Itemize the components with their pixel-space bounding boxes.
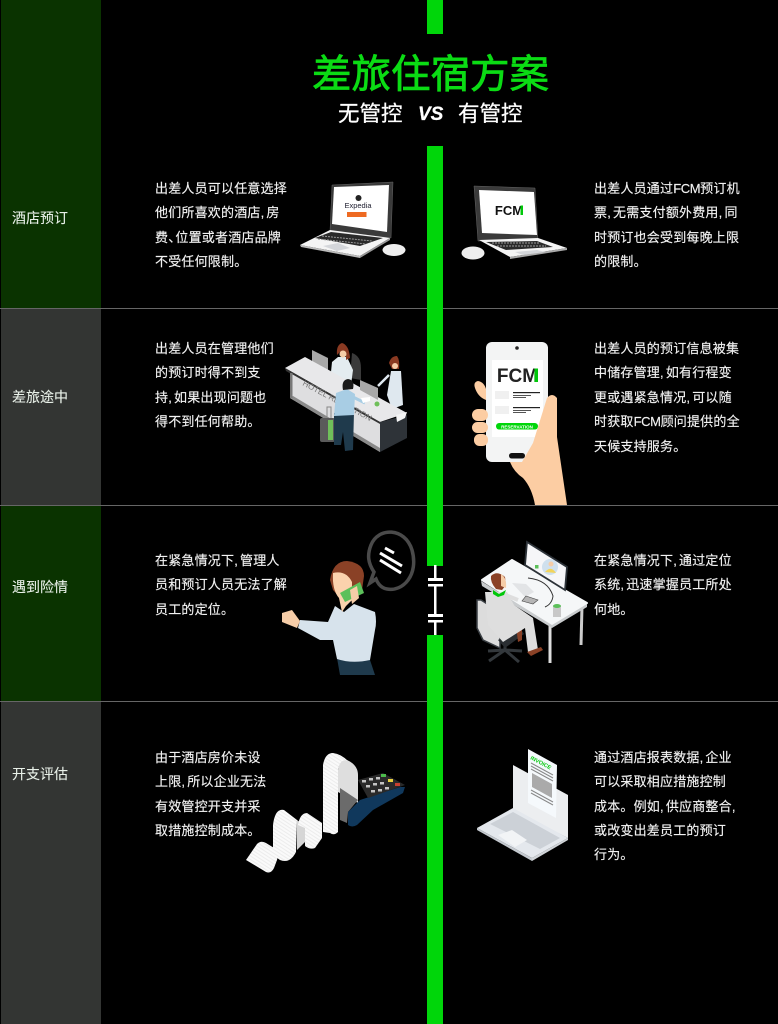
icon: laptop with FCM: FCM: [495, 203, 523, 218]
text: emergencies with control: 系统,迅速掌握员工所处: [594, 577, 732, 592]
text: emergencies without control: 员工的定位。: [155, 602, 234, 617]
row label: during trip: 差旅途中: [12, 389, 68, 405]
text: emergencies without control: [155, 553, 287, 617]
icon: laptop with invoice: INVOICE: [529, 755, 552, 772]
text: during trip without control: 的预订时得不到支: [155, 365, 261, 380]
subtitle: no control vs control: VS: [418, 104, 444, 125]
text: emergencies with control: 何地。: [594, 602, 634, 617]
text: during trip with FCM: 更或遇紧急情况,可以随: [594, 390, 732, 405]
icon: payment terminal with receipt: [246, 753, 405, 872]
text: hotel booking with FCM: [594, 181, 740, 269]
icon: hand holding phone: RESERVATION: [501, 424, 533, 430]
icon: laptop with invoice: [477, 749, 568, 861]
text: hotel booking without control: 不受任何限制。: [155, 254, 247, 269]
icon: hotel reception desk: [285, 343, 407, 452]
text: expenses without control: [155, 750, 266, 838]
icon: laptop with Expedia: [300, 182, 406, 258]
text: expenses with control: 行为。: [594, 847, 634, 862]
row label: emergencies: 遇到险情: [12, 579, 68, 595]
text: expenses with control: 可以采取相应措施控制: [594, 774, 726, 789]
text: hotel booking without control: 出差人员可以任意选择: [155, 181, 287, 196]
title: 差旅住宿方案: [312, 53, 549, 97]
text: hotel booking without control: 费、位置或者酒店品牌: [155, 230, 281, 245]
subtitle: no control vs control: 有管控: [458, 102, 523, 126]
icon: hand holding phone: FCM: [497, 366, 538, 387]
text: expenses with control: 成本。例如,供应商整合,: [594, 799, 736, 814]
text: during trip with FCM: [594, 341, 740, 454]
text: hotel booking with FCM: 出差人员通过FCM预订机: [594, 181, 740, 196]
icon: woman on phone with speech bubble: [282, 532, 414, 675]
icon: employee at desk with monitor: [477, 542, 587, 663]
text: during trip without control: 得不到任何帮助。: [155, 414, 261, 429]
subtitle: no control vs control: 无管控: [338, 102, 403, 126]
icon: laptop with FCM: [462, 186, 567, 260]
text: during trip without control: [155, 341, 274, 429]
text: hotel booking with FCM: 票,无需支付额外费用,同: [594, 205, 738, 220]
text: expenses without control: 取措施控制成本。: [155, 823, 261, 838]
text: hotel booking with FCM: 时预订也会受到每晚上限: [594, 230, 739, 245]
icon: hand holding phone: [472, 342, 567, 505]
text: expenses without control: 由于酒店房价未设: [155, 750, 261, 765]
text: during trip with FCM: 出差人员的预订信息被集: [594, 341, 739, 356]
row label: expense assessment: 开支评估: [12, 766, 68, 782]
text: emergencies without control: 员和预订人员无法了解: [155, 577, 287, 592]
text: emergencies with control: 在紧急情况下,通过定位: [594, 553, 732, 568]
text: emergencies without control: 在紧急情况下,管理人: [155, 553, 280, 568]
text: during trip with FCM: 天候支持服务。: [594, 439, 686, 454]
text: hotel booking without control: [155, 181, 287, 269]
icon: laptop with Expedia: Expedia: [344, 201, 372, 210]
text: hotel booking with FCM: 的限制。: [594, 254, 647, 269]
subtitle: no control vs control: [338, 102, 523, 126]
text: expenses without control: 上限,所以企业无法: [155, 774, 266, 789]
row label: hotel booking: 酒店预订: [12, 210, 68, 226]
green center divider with break symbol: [427, 0, 443, 1024]
text: during trip without control: 持,如果出现问题也: [155, 390, 266, 405]
text: emergencies with control: [594, 553, 732, 617]
text: during trip with FCM: 时获取FCM顾问提供的全: [594, 414, 740, 429]
text: expenses with control: [594, 750, 736, 862]
icon: hotel reception desk: HOTEL RECEPTION: [301, 379, 373, 423]
text: during trip without control: 出差人员在管理他们: [155, 341, 274, 356]
text: during trip with FCM: 中储存管理,如有行程变: [594, 365, 732, 380]
text: hotel booking without control: 他们所喜欢的酒店,房: [155, 205, 280, 220]
text: expenses without control: 有效管控开支并采: [155, 799, 261, 814]
text: expenses with control: 或改变出差员工的预订: [594, 823, 726, 838]
text: expenses with control: 通过酒店报表数据,企业: [594, 750, 732, 765]
